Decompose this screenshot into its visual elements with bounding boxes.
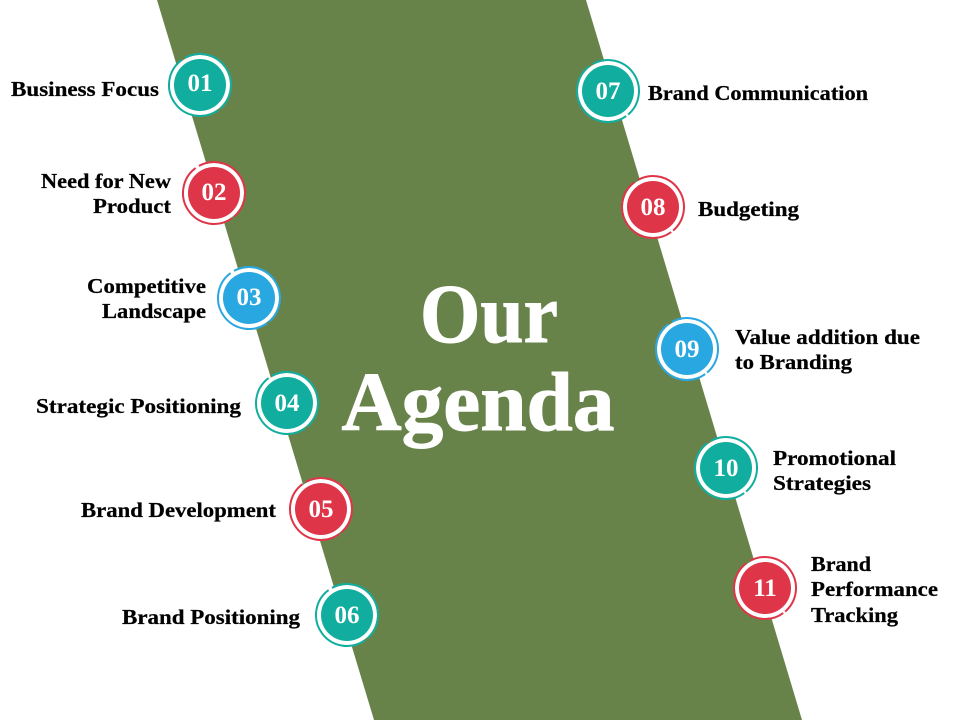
item 02: need for new product: 02 xyxy=(202,179,226,206)
item 10: promotional strategies: Strategies xyxy=(773,471,871,495)
item 02: need for new product: Product xyxy=(93,194,171,218)
item 11: brand performance tracking: Performance xyxy=(811,577,938,601)
item 06: brand positioning: Brand Positioning xyxy=(122,605,301,629)
item 03: competitive landscape xyxy=(87,255,292,341)
green slanted band xyxy=(157,0,802,720)
item 07: brand communication: 07 xyxy=(596,78,620,105)
item 01: business focus xyxy=(11,42,243,128)
item 04: strategic positioning xyxy=(36,360,330,446)
item 10: promotional strategies: Promotional xyxy=(773,446,896,470)
item 05: brand development: Brand Development xyxy=(81,498,276,522)
item 11: brand performance tracking: Tracking xyxy=(811,603,899,627)
item 01: business focus: 01 xyxy=(188,70,212,97)
item 09: value addition due to branding: to Branding xyxy=(735,350,853,374)
item 08: budgeting xyxy=(610,164,800,250)
item 11: brand performance tracking xyxy=(722,545,938,631)
item 07: brand communication xyxy=(565,48,868,134)
item 08: budgeting: 08 xyxy=(640,194,666,221)
item 09: value addition due to branding: 09 xyxy=(674,336,700,363)
title xyxy=(342,268,614,449)
title: Our xyxy=(420,268,558,361)
item 03: competitive landscape: Landscape xyxy=(102,299,206,323)
item 07: brand communication: Brand Communication xyxy=(648,81,868,105)
item 06: brand positioning xyxy=(122,572,390,658)
item 06: brand positioning: 06 xyxy=(334,602,360,629)
item 04: strategic positioning: 04 xyxy=(274,390,300,417)
item 05: brand development: 05 xyxy=(308,496,334,523)
item 11: brand performance tracking: Brand xyxy=(811,552,871,576)
item 03: competitive landscape: 03 xyxy=(236,284,262,311)
item 02: need for new product xyxy=(41,150,257,236)
item 03: competitive landscape: Competitive xyxy=(87,274,206,298)
item 08: budgeting: Budgeting xyxy=(698,197,800,221)
item 10: promotional strategies xyxy=(683,425,896,511)
item 09: value addition due to branding xyxy=(644,306,920,392)
item 05: brand development xyxy=(81,466,364,552)
item 02: need for new product: Need for New xyxy=(41,169,172,193)
item 10: promotional strategies: 10 xyxy=(714,455,738,482)
item 09: value addition due to branding: Value addition due xyxy=(735,325,920,349)
title: Agenda xyxy=(342,356,614,449)
item 11: brand performance tracking: 11 xyxy=(753,575,777,602)
item 01: business focus: Business Focus xyxy=(11,77,159,101)
item 04: strategic positioning: Strategic Positioning xyxy=(36,394,242,418)
